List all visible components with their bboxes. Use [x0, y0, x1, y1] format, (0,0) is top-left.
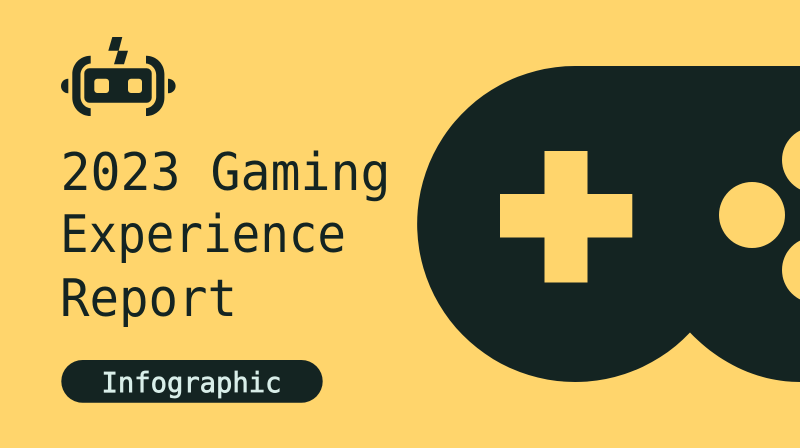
icon: robot with lightning bolt	[61, 37, 176, 116]
badge: Infographic: Infographic	[102, 366, 282, 399]
game controller	[417, 66, 800, 382]
badge: Infographic	[61, 360, 323, 403]
title: Report	[60, 269, 237, 329]
icon: d-pad	[500, 151, 632, 282]
controller buttons	[719, 127, 800, 303]
title: 2023 Gaming	[60, 143, 390, 203]
title: Experience	[60, 205, 346, 265]
title	[60, 143, 390, 329]
